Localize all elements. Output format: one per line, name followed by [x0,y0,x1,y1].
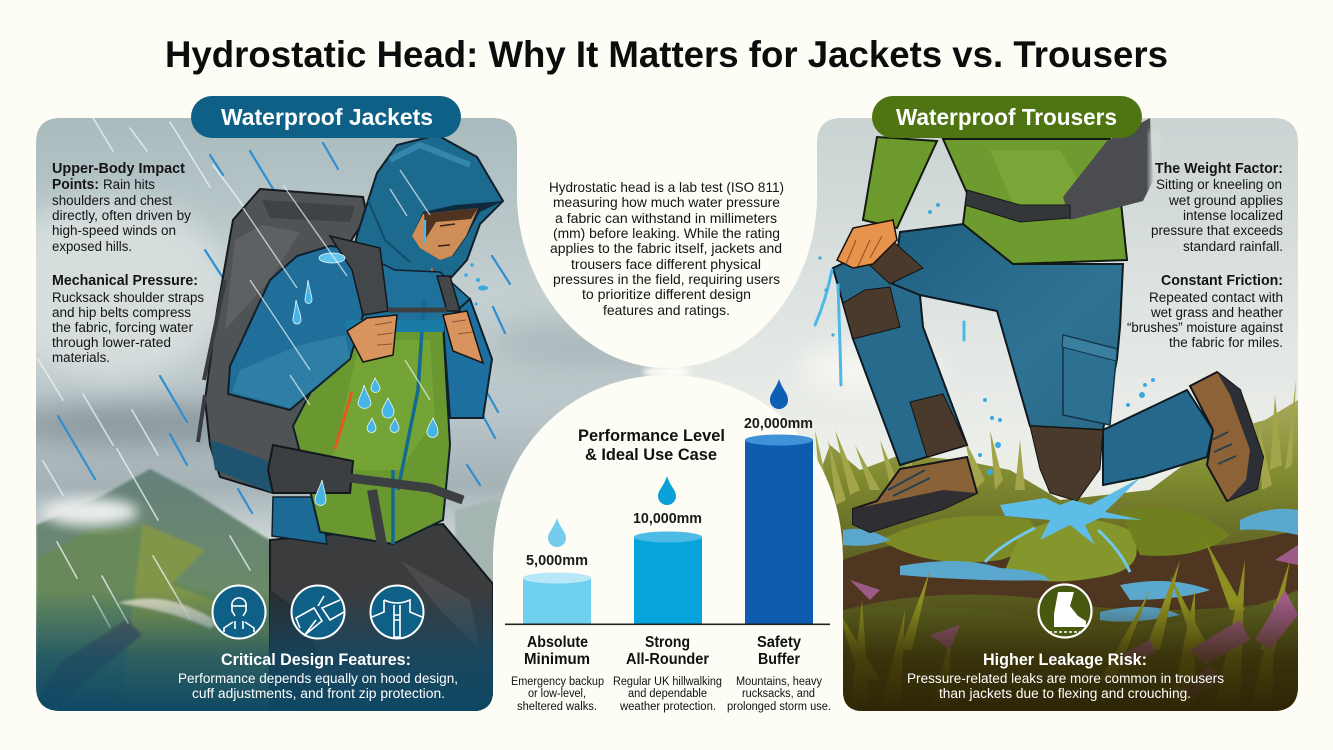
text block: hydrostatic head explanation: trousers face different physical [571,256,761,272]
text block: upper-body impact points: directly, often driven by [52,208,191,223]
hand on knee [837,220,897,268]
text block: critical design features: cuff adjustments, and front zip protection. [192,686,445,701]
rain streaks over hiker [243,170,430,405]
text block: upper-body impact points: Rain hits [103,177,155,192]
chart baseline [505,624,830,625]
panel: left pill heading: Waterproof Jackets [221,104,433,130]
text block: hydrostatic head explanation: (mm) before leaking. While the rating [553,225,780,241]
text block: mechanical pressure: Rucksack shoulder straps [52,290,204,305]
text block: constant friction: Constant Friction: [1161,272,1283,289]
panel: right pill heading: Waterproof Trousers [896,104,1117,130]
labels: absolute minimum: sheltered walks. [517,701,597,713]
shoulder straps and hip belt [268,236,463,545]
text block: mechanical pressure: Mechanical Pressure: [52,272,198,289]
foreground grass and heather [838,540,1298,711]
icon: hood [212,586,266,638]
text block: higher leakage risk: than jackets due to flexing and crouching. [939,686,1191,701]
mud and moss [843,508,1298,711]
labels: absolute minimum [511,634,604,713]
text block: hydrostatic head explanation: features and ratings. [603,302,730,318]
text block: the weight factor [1151,160,1283,254]
water drops on jacket [293,253,438,506]
labels: safety buffer: rucksacks, and [742,688,815,700]
text block: upper-body impact points: Points: [52,176,99,193]
labels: strong all-rounder: Regular UK hillwalking [613,676,722,688]
knee patches [843,236,1103,501]
panel: right pill heading [872,96,1142,138]
text block: critical design features: Critical Design Features: [221,651,411,669]
bar chart: hydrostatic head ratings [505,379,830,625]
labels: strong all-rounder: Strong [645,634,690,651]
front lower leg [833,240,967,465]
text block: hydrostatic head explanation: measuring how much water pressure [553,194,780,210]
bar: 20,000mm [744,379,813,624]
water streams from splash [985,528,1130,572]
backpack fade near text [1147,127,1153,192]
hood and face [354,138,504,279]
text block: constant friction: Repeated contact with [1149,290,1283,305]
chart heading [578,426,725,464]
droplets beside chest [464,263,488,306]
panel: left pill heading [191,96,461,138]
hands [347,311,483,363]
splash at knee [1000,478,1142,545]
labels: absolute minimum: or low-level, [528,688,586,700]
hip belt [965,190,1070,222]
text block: mechanical pressure [52,272,204,365]
grass tufts [815,380,1296,510]
labels: safety buffer: Buffer [758,651,800,668]
backpack [198,189,367,493]
bottom colour fade [36,594,493,711]
text block: upper-body impact points: high-speed winds on [52,223,176,238]
icon: boot [1038,584,1092,638]
text block: the weight factor: The Weight Factor: [1155,160,1283,177]
labels: strong all-rounder: All-Rounder [626,651,709,668]
text block: constant friction [1127,272,1283,350]
hiker trousers [270,524,493,711]
bar: 10,000mm: 10,000mm [633,511,702,527]
cargo pocket [1062,335,1117,425]
text block: hydrostatic head explanation: pressures in the field, requiring users [553,271,780,287]
labels: safety buffer: prolonged storm use. [727,701,831,713]
chart heading: & Ideal Use Case [585,445,717,464]
junction glow between panels [643,366,691,378]
labels: safety buffer: Mountains, heavy [736,676,822,688]
text block: the weight factor: wet ground applies [1168,193,1283,208]
text block: higher leakage risk: Higher Leakage Risk: [983,651,1147,669]
rear boot [1190,372,1263,501]
text block: the weight factor: standard rainfall. [1183,239,1283,254]
text block: upper-body impact points: shoulders and chest [52,193,172,208]
text block: upper-body impact points: Upper-Body Impact [52,160,185,177]
labels: strong all-rounder: weather protection. [619,701,716,713]
text block: hydrostatic head explanation: a fabric can withstand in millimeters [555,210,777,226]
text block: hydrostatic head explanation: Hydrostatic head is a lab test (ISO 811) [549,179,784,195]
bar: 20,000mm: 20,000mm [744,416,813,432]
text block: upper-body impact points: exposed hills. [52,239,132,254]
bar: 10,000mm [633,476,702,624]
front boot [853,457,977,532]
text block: constant friction: the fabric for miles. [1169,335,1283,350]
labels: strong all-rounder [613,634,722,713]
rain streaks behind hiker [38,118,510,627]
panel: waterproof jackets illustration [36,118,667,711]
text block: constant friction: “brushes” moisture against [1127,320,1283,335]
text block: hydrostatic head explanation: to prioritize different design [582,286,751,302]
bar: 5,000mm [523,518,591,624]
chart heading: Performance Level [578,426,725,445]
bar: 5,000mm: 5,000mm [526,553,588,569]
green jacket [863,137,1127,264]
text block: mechanical pressure: through lower-rated [52,335,171,350]
text block: mechanical pressure: materials. [52,350,110,365]
text block: the weight factor: intense localized [1183,208,1283,223]
text block: constant friction: wet grass and heather [1150,305,1283,320]
text block: critical design features [178,651,458,701]
water run-off and droplets [815,203,1155,475]
bottom colour fade [843,605,1298,711]
labels: safety buffer: Safety [757,634,801,651]
icon: front zip [370,586,424,638]
labels: strong all-rounder: and dependable [628,688,707,700]
water pools [843,509,1298,622]
labels: safety buffer [727,634,831,713]
text block: hydrostatic head explanation [549,179,784,318]
rear calf [1103,390,1213,485]
text block: higher leakage risk [907,651,1224,701]
text block: mechanical pressure: and hip belts compress [52,305,191,320]
text block: mechanical pressure: the fabric, forcing water [52,320,193,335]
labels: absolute minimum: Emergency backup [511,676,604,688]
labels: absolute minimum: Absolute [527,634,588,651]
text block: the weight factor: pressure that exceeds [1151,223,1283,238]
panel: waterproof trousers illustration [660,118,1300,711]
icon: cuff [292,586,344,638]
text block: critical design features: Performance depends equally on hood design, [178,671,458,686]
moorland ground [810,400,1298,711]
text block: hydrostatic head explanation: applies to the fabric itself, jackets and [550,240,782,256]
text block: upper-body impact points [52,160,191,254]
title: Hydrostatic Head: Why It Matters for Jackets vs. Trousers [165,34,1168,75]
mountains [36,469,540,711]
jacket body [228,246,492,544]
labels: absolute minimum: Minimum [524,651,590,668]
thigh and kneeling shin [893,224,1123,430]
small backpack [1063,118,1153,220]
text block: the weight factor: Sitting or kneeling on [1156,177,1282,192]
text block: higher leakage risk: Pressure-related leaks are more common in trousers [907,671,1224,686]
